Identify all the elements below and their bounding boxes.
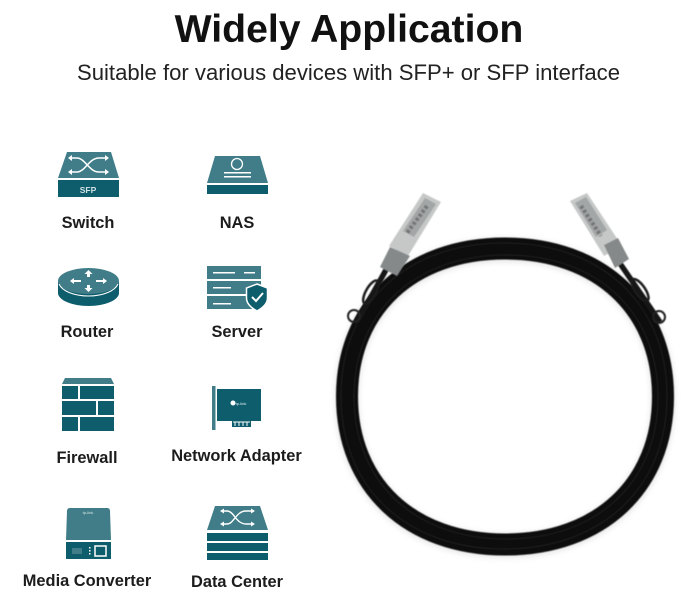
icon: network adapter: tp-link bbox=[236, 401, 246, 406]
icon: data center bbox=[207, 506, 268, 560]
left connector bbox=[348, 193, 441, 322]
icon: media converter bbox=[66, 508, 111, 559]
title: Widely Application bbox=[175, 8, 523, 51]
icon: switch: SFP bbox=[80, 185, 97, 195]
coil shadow bbox=[347, 250, 663, 546]
label: Switch: Switch bbox=[62, 214, 114, 232]
label: Server: Server bbox=[211, 323, 263, 341]
icon: router bbox=[58, 268, 119, 306]
icon: server bbox=[207, 266, 268, 311]
label: Network Adapter: Network Adapter bbox=[171, 447, 302, 465]
icon: firewall bbox=[62, 378, 114, 431]
subtitle: Suitable for various devices with SFP+ or SFP interface bbox=[77, 60, 620, 85]
label: Firewall: Firewall bbox=[56, 449, 118, 467]
label: Data Center: Data Center bbox=[191, 573, 284, 591]
icon: NAS bbox=[207, 156, 268, 194]
label: Media Converter: Media Converter bbox=[23, 572, 152, 590]
label: NAS: NAS bbox=[220, 214, 254, 232]
icon: network adapter bbox=[212, 386, 261, 430]
coil strands bbox=[347, 248, 663, 544]
icon: switch bbox=[58, 152, 119, 197]
icon: media converter: tp-link bbox=[83, 510, 93, 515]
label: Router: Router bbox=[61, 323, 114, 341]
right connector bbox=[570, 193, 665, 323]
cable: DAC coil with two SFP+ connectors bbox=[341, 193, 667, 549]
